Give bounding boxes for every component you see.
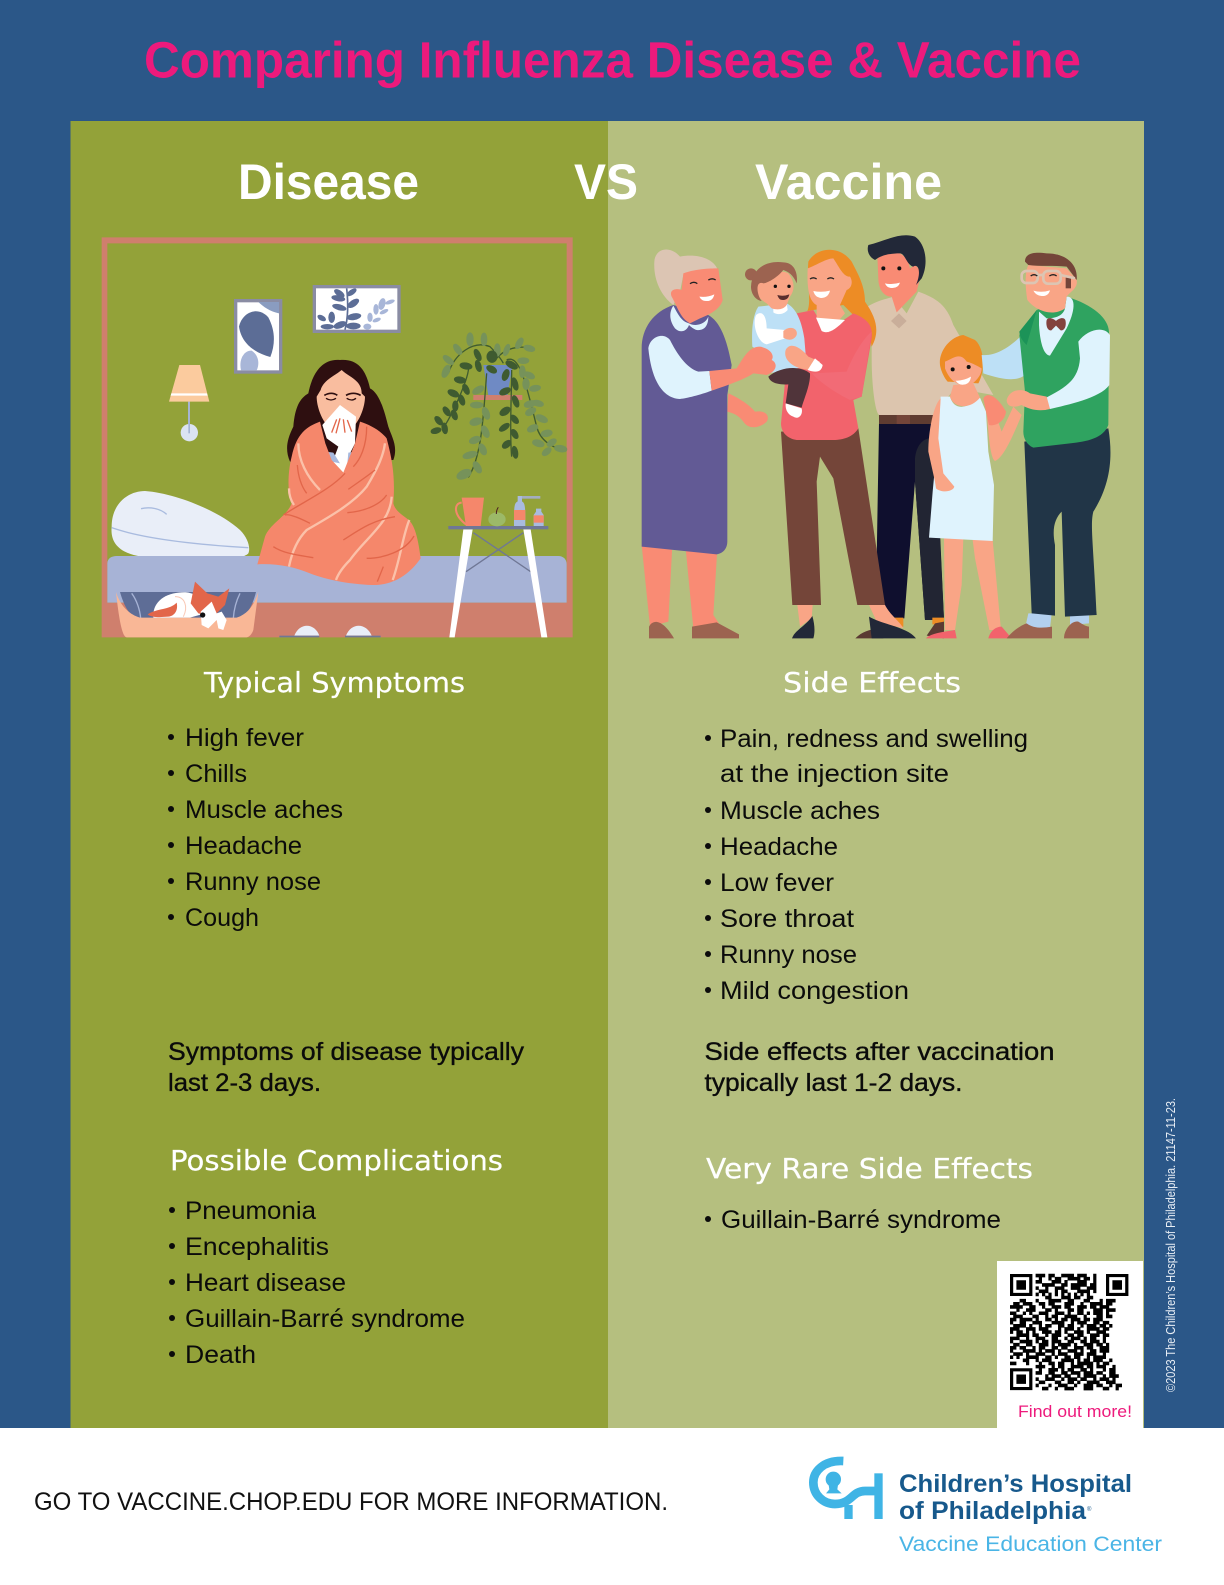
list: side effects: at the injection site <box>720 760 949 788</box>
blanket <box>257 422 421 585</box>
list: symptoms: Runny nose <box>185 868 321 896</box>
heading: very rare side effects: Very Rare Side Effects <box>706 1153 1033 1185</box>
panel: disease <box>70 121 608 1428</box>
title: Comparing Influenza Disease & Vaccine <box>144 32 1081 88</box>
QR code <box>1010 1274 1128 1390</box>
picture: monstera leaf <box>236 301 281 372</box>
list: side effects <box>705 725 1028 1005</box>
text: side effect duration: Side effects after vaccination <box>704 1038 1054 1066</box>
girl <box>926 335 1022 638</box>
heading: side effects: Side Effects <box>783 667 961 699</box>
list: side effects: Sore throat <box>720 905 854 933</box>
text: side effect duration: typically last 1-2 days. <box>704 1069 962 1097</box>
list: complications: Death <box>185 1341 256 1369</box>
list: side effects: Pain, redness and swelling <box>720 725 1028 753</box>
logo: Children's Hospital of Philadelphia: ® <box>1087 1506 1092 1513</box>
panel: vaccine <box>608 121 1144 1428</box>
picture: ferns <box>314 287 399 331</box>
father <box>855 235 993 638</box>
logo: Children's Hospital of Philadelphia: of Philadelphia <box>899 1497 1087 1525</box>
hanging plant <box>431 333 567 481</box>
list: complications: Guillain-Barré syndrome <box>185 1305 465 1333</box>
text: side effect duration <box>704 1038 1054 1097</box>
footer band <box>0 1428 1224 1585</box>
slippers <box>279 626 381 637</box>
list: side effects: Mild congestion <box>720 977 909 1005</box>
text: symptom duration: last 2-3 days. <box>168 1069 321 1097</box>
logo wordmark: Children’s Hospital <box>899 1470 1132 1498</box>
pillow <box>111 491 249 559</box>
logo: Children's Hospital of Philadelphia: Vaccine Education Center <box>899 1533 1162 1556</box>
list: symptoms: Muscle aches <box>185 796 343 824</box>
logo mark <box>813 1461 883 1519</box>
list: complications: Encephalitis <box>185 1233 329 1261</box>
text: symptom duration: Symptoms of disease typically <box>168 1038 525 1066</box>
bedside table <box>448 496 548 637</box>
heading: vaccine: Vaccine <box>755 154 942 210</box>
footer call to action: GO TO VACCINE.CHOP.EDU FOR MORE INFORMATION. <box>34 1488 668 1516</box>
room frame <box>102 237 573 637</box>
list: side effects: Low fever <box>720 869 834 897</box>
list: symptoms: Chills <box>185 760 247 788</box>
illustration: sick woman in bedroom <box>102 237 573 637</box>
list: side effects: Runny nose <box>720 941 857 969</box>
heading: typical symptoms: Typical Symptoms <box>203 667 465 699</box>
list: symptoms: Cough <box>185 904 259 932</box>
list: side effects: Headache <box>720 833 838 861</box>
grandfather <box>982 253 1110 638</box>
illustration: happy family <box>642 235 1110 638</box>
woman with hair <box>257 360 421 585</box>
logo: Children's Hospital of Philadelphia <box>813 1461 1162 1556</box>
toddler <box>745 262 823 418</box>
list: complications: Heart disease <box>185 1269 346 1297</box>
heading: VS: VS <box>574 154 638 210</box>
dog bed with dog <box>116 582 258 637</box>
text: symptom duration <box>168 1038 525 1097</box>
QR caption: Find out more! <box>1018 1402 1132 1421</box>
list: symptoms: Headache <box>185 832 302 860</box>
list: complications: Pneumonia <box>185 1197 316 1225</box>
wall lamp <box>169 365 209 441</box>
heading: possible complications: Possible Complications <box>170 1145 503 1177</box>
copyright line: ©2023 The Children’s Hospital of Philadelphia. 21147-11-23. <box>1163 1098 1178 1392</box>
heading: disease: Disease <box>238 154 419 210</box>
QR code card <box>997 1261 1143 1428</box>
list: side effects: Muscle aches <box>720 797 880 825</box>
bed <box>107 556 567 603</box>
mother <box>781 250 916 638</box>
list: symptoms: High fever <box>185 724 304 752</box>
grandmother <box>642 250 776 638</box>
list: symptoms <box>168 724 343 932</box>
list: complications <box>169 1197 465 1369</box>
list: rare side effects: Guillain-Barré syndrome <box>721 1206 1001 1234</box>
